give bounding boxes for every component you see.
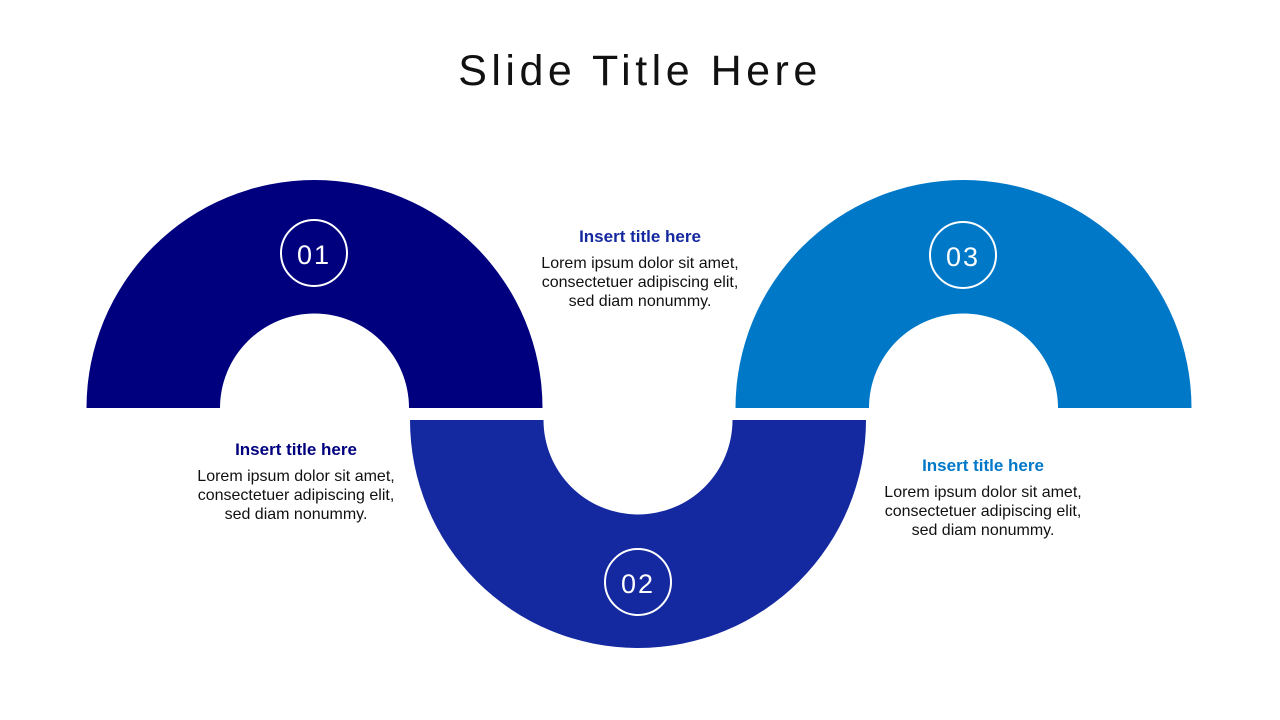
text block 01: Insert title here — [235, 440, 357, 459]
text block 02: Insert title here — [579, 227, 701, 246]
text block 03 — [884, 456, 1082, 539]
text block 02 — [541, 227, 739, 310]
text block 01: consectetuer adipiscing elit, — [198, 487, 394, 504]
arc 03 — [736, 180, 1192, 408]
text block 01 — [197, 440, 395, 523]
text block 03: consectetuer adipiscing elit, — [885, 503, 1081, 520]
text block 02: sed diam nonummy. — [569, 293, 711, 310]
title: Slide Title Here — [458, 47, 822, 95]
arc 01: 01 — [297, 240, 331, 270]
arc 02: 02 — [621, 569, 655, 599]
text block 02: Lorem ipsum dolor sit amet, — [541, 255, 739, 272]
text block 03: sed diam nonummy. — [912, 522, 1054, 539]
text block 01: sed diam nonummy. — [225, 506, 367, 523]
text block 03: Insert title here — [922, 456, 1044, 475]
text block 01: Lorem ipsum dolor sit amet, — [197, 468, 395, 485]
arc 01 — [86, 180, 542, 408]
text block 03: Lorem ipsum dolor sit amet, — [884, 484, 1082, 501]
arc 03: 03 — [946, 242, 980, 272]
arc 02 — [410, 420, 866, 648]
text block 02: consectetuer adipiscing elit, — [542, 274, 738, 291]
